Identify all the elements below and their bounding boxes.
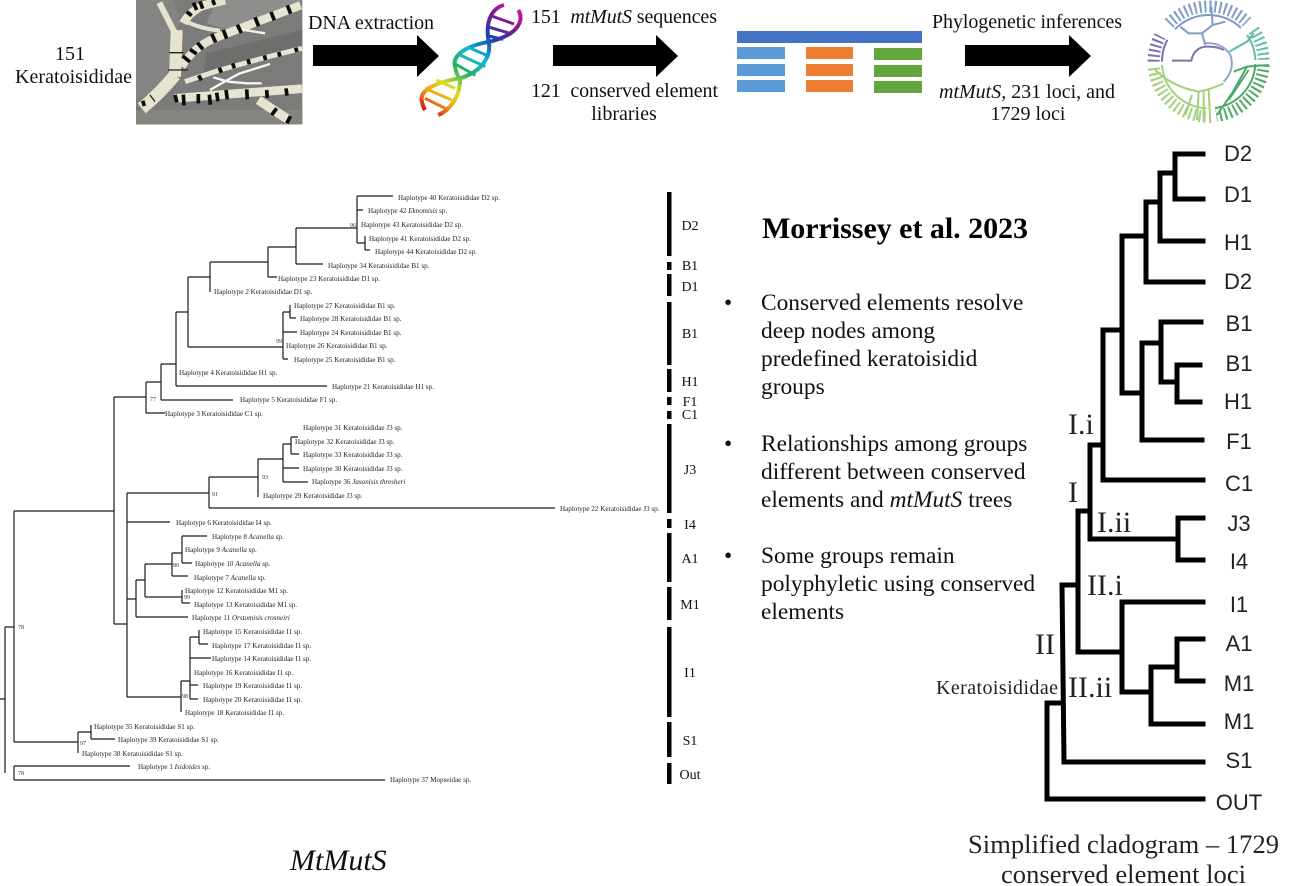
cladogram tip labels: B1 (1226, 351, 1252, 376)
node support values: 80 (173, 563, 179, 569)
caption: simplified cladogram: Simplified cladogram – 1729 (968, 829, 1279, 859)
cladogram tip labels: M1 (1224, 671, 1254, 696)
clade labels: II (1035, 628, 1055, 661)
tip labels: Haplotype 11 Orstomisis crosneiri (192, 614, 290, 622)
tip labels: Haplotype 41 Keratoisididae D2 sp. (369, 235, 471, 243)
group bars and labels: F1 (683, 395, 697, 410)
chart: MtMutS haplotype tree (0, 194, 660, 784)
cladogram tip labels: D2 (1224, 269, 1252, 294)
group bars and labels: H1 (681, 375, 699, 390)
tip labels: Haplotype 24 Keratoisididae B1 sp. (300, 329, 402, 337)
tip labels (82, 194, 660, 784)
clade labels: I.i (1068, 408, 1094, 441)
node support values: 98 (182, 694, 188, 700)
tip labels: Haplotype 28 Keratoisididae B1 sp. (300, 315, 402, 323)
bullet list: elements and mtMutS trees (761, 487, 1012, 513)
tip labels: Haplotype 13 Keratoisididae M1 sp. (194, 601, 297, 609)
cladogram tip labels: I4 (1230, 549, 1248, 574)
tip labels: Haplotype 40 Keratoisididae D2 sp. (398, 194, 500, 202)
tip labels: Haplotype 22 Keratoisididae J3 sp. (560, 505, 660, 513)
tip labels: Haplotype 38 Keratoisididae S1 sp. (82, 750, 183, 758)
arrow: DNA extraction (308, 12, 439, 77)
bullet list: predefined keratoisidid (761, 346, 978, 372)
tip labels: Haplotype 4 Keratoisididae H1 sp. (179, 369, 278, 377)
tip labels: Haplotype 23 Keratoisididae D1 sp. (278, 275, 380, 283)
clade labels: II.ii (1068, 671, 1112, 704)
bullet list: polyphyletic using conserved (761, 571, 1035, 597)
bullet list: • (724, 543, 732, 569)
group bars and labels: A1 (681, 552, 699, 567)
tip labels: Haplotype 14 Keratoisididae I1 sp. (212, 655, 311, 663)
node support values: 99 (276, 339, 282, 345)
cladogram tip labels: S1 (1226, 748, 1252, 773)
heading: Morrissey et al. 2023: Morrissey et al. 2023 (762, 212, 1028, 245)
photo: bamboo coral (136, 0, 302, 124)
text: phylogenetic inferences: mtMutS, 231 loci, and (939, 81, 1115, 103)
tip labels: Haplotype 42 Eknomisis sp. (368, 207, 447, 215)
tip labels: Haplotype 39 Keratoisididae S1 sp. (118, 736, 219, 744)
bullet list: different between conserved (761, 459, 1026, 485)
cladogram tip labels: M1 (1224, 709, 1254, 734)
node support values: 78 (18, 771, 24, 777)
tip labels: Haplotype 12 Keratoisididae M1 sp. (185, 587, 288, 595)
tip labels: Haplotype 20 Keratoisididae I1 sp. (203, 696, 302, 704)
tip labels: Haplotype 16 Keratoisididae I1 sp. (194, 669, 293, 677)
bullet list: Relationships among groups (761, 431, 1027, 457)
tip labels: Haplotype 25 Keratoisididae B1 sp. (294, 356, 396, 364)
tip labels: Haplotype 36 Jasonisis thresheri (312, 478, 405, 486)
bullet list: deep nodes among (761, 318, 935, 344)
arrow: phylogenetic inference (965, 35, 1091, 77)
tip labels: Haplotype 15 Keratoisididae I1 sp. (203, 628, 302, 636)
text: phylogenetic inferences (932, 11, 1122, 125)
cladogram tip labels: H1 (1224, 230, 1252, 255)
group bars and labels: S1 (683, 734, 697, 749)
node support values: 93 (262, 475, 268, 481)
tip labels: Haplotype 44 Keratoisididae D2 sp. (375, 248, 477, 256)
tip labels: Haplotype 5 Keratoisididae F1 sp. (240, 396, 337, 404)
clade labels: II.i (1087, 569, 1123, 602)
text: phylogenetic inferences: Phylogenetic inferences (932, 11, 1122, 33)
cladogram tip labels: A1 (1226, 631, 1252, 656)
group bars and labels: Out (680, 768, 701, 783)
label: Keratoisididae: Keratoisididae (936, 677, 1058, 699)
cladogram tip labels: OUT (1216, 790, 1262, 815)
group bars and labels: I1 (684, 666, 696, 681)
cladogram tip labels: D2 (1224, 141, 1252, 166)
chart: simplified cladogram (936, 141, 1262, 815)
caption: simplified cladogram (968, 829, 1279, 886)
tip labels: Haplotype 8 Acanella sp. (212, 533, 284, 541)
tip labels: Haplotype 32 Keratoisididae J3 sp. (295, 438, 395, 446)
tip labels: Haplotype 31 Keratoisididae J3 sp. (303, 424, 403, 432)
tip labels: Haplotype 7 Acanella sp. (194, 574, 266, 582)
cladogram tip labels (1216, 141, 1262, 815)
tip labels: Haplotype 34 Keratoisididae B1 sp. (328, 262, 430, 270)
tip labels: Haplotype 10 Acanella sp. (195, 560, 271, 568)
tip labels: Haplotype 3 Keratoisididae C1 sp. (165, 410, 263, 418)
clade labels: I.ii (1097, 506, 1131, 539)
tree branches (0, 196, 555, 780)
cladogram tip labels: I1 (1230, 592, 1248, 617)
cladogram branches (1047, 154, 1203, 799)
text: phylogenetic inferences: 1729 loci (990, 103, 1066, 125)
group bars and labels: D2 (681, 219, 699, 234)
node support values: 91 (212, 492, 218, 498)
tip labels: Haplotype 27 Keratoisididae B1 sp. (294, 302, 396, 310)
arrow: sequencing (553, 35, 678, 77)
arrow: DNA extraction: DNA extraction (308, 12, 434, 34)
cladogram tip labels: F1 (1226, 429, 1252, 454)
cladogram tip labels: B1 (1226, 311, 1252, 336)
bullet list: Conserved elements resolve (761, 290, 1023, 316)
node support values: 97 (80, 741, 86, 747)
icon: circular phylogeny (1154, 6, 1269, 123)
tip labels: Haplotype 21 Keratoisididae H1 sp. (332, 383, 434, 391)
tip labels: Haplotype 17 Keratoisididae I1 sp. (212, 642, 311, 650)
tip labels: Haplotype 35 Keratoisididae S1 sp. (94, 723, 195, 731)
bullet list: groups (761, 374, 825, 400)
group bars and labels: B1 (682, 259, 698, 274)
node support values: 77 (150, 397, 156, 403)
group bars and labels (667, 192, 701, 784)
cladogram tip labels: J3 (1227, 511, 1251, 536)
node support values: 96 (350, 223, 356, 229)
tip labels: Haplotype 18 Keratoisididae I1 sp. (185, 709, 284, 717)
text: sequences and libraries: 121 conserved element (531, 80, 718, 102)
bullet list: • (724, 290, 732, 316)
text: sequences and libraries: libraries (591, 103, 657, 125)
cladogram tip labels: D1 (1224, 182, 1252, 207)
tip labels: Haplotype 19 Keratoisididae I1 sp. (203, 682, 302, 690)
tip labels: Haplotype 29 Keratoisididae J3 sp. (263, 492, 363, 500)
group bars and labels: I4 (684, 518, 696, 533)
bullet list: elements (761, 599, 844, 625)
bullet list (724, 290, 1035, 625)
tip labels: Haplotype 30 Keratoisididae J3 sp. (303, 465, 403, 473)
tip labels: Haplotype 43 Keratoisididae D2 sp. (361, 221, 463, 229)
group bars and labels: M1 (680, 598, 700, 613)
group bars and labels: J3 (684, 463, 696, 478)
node support values: 78 (18, 625, 24, 631)
group bars and labels: C1 (682, 408, 698, 423)
clade labels (1035, 408, 1131, 704)
text: sequences and libraries (531, 6, 718, 125)
text: 151 Keratoisididae: 151 (55, 43, 85, 65)
group bars and labels: D1 (681, 280, 699, 295)
bullet list: • (724, 431, 732, 457)
tip labels: Haplotype 1 Isidoides sp. (138, 763, 210, 771)
bullet list: Some groups remain (761, 543, 955, 569)
tip labels: Haplotype 33 Keratoisididae J3 sp. (303, 451, 403, 459)
icon: DNA helix (422, 5, 521, 115)
clade labels: I (1068, 476, 1078, 509)
icon: conserved element library bars (737, 31, 922, 93)
tip labels: Haplotype 26 Keratoisididae B1 sp. (286, 342, 388, 350)
tip labels: Haplotype 9 Acanella sp. (185, 546, 257, 554)
node support values (18, 223, 356, 777)
group bars and labels: B1 (682, 327, 698, 342)
tip labels: Haplotype 2 Keratoisididae D1 sp. (214, 288, 313, 296)
node support values: 99 (184, 595, 190, 601)
tip labels: Haplotype 6 Keratoisididae I4 sp. (176, 519, 272, 527)
cladogram tip labels: C1 (1225, 471, 1253, 496)
tip labels: Haplotype 37 Mopseidae sp. (390, 776, 471, 784)
cladogram tip labels: H1 (1224, 389, 1252, 414)
text: 151 Keratoisididae: Keratoisididae (15, 66, 132, 88)
caption: MtMutS: MtMutS (289, 844, 387, 877)
text: 151 Keratoisididae (15, 43, 132, 88)
text: sequences and libraries: 151 mtMutS sequences (531, 6, 717, 28)
